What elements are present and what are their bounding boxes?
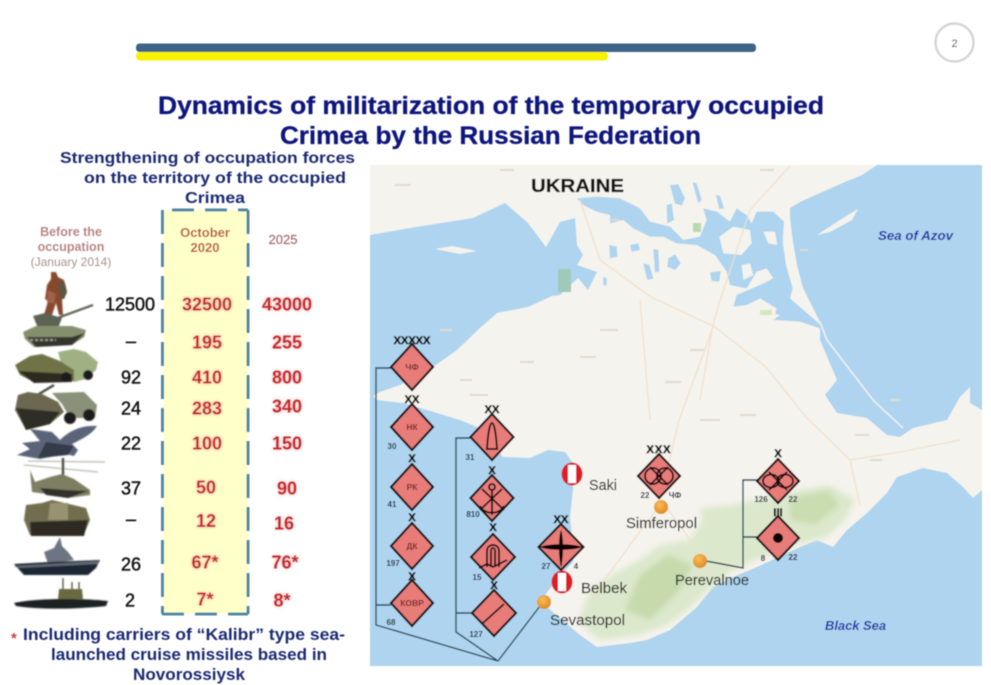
figures 2025: 340 bbox=[272, 396, 302, 416]
symbol: НК division bbox=[388, 394, 433, 451]
page number badge bbox=[936, 24, 974, 62]
symbol: brigade 127: X bbox=[490, 580, 498, 592]
marker: Belbek airfield bbox=[552, 570, 572, 594]
symbol: missile division 31: XX bbox=[485, 404, 500, 416]
figures October 2020: 50 bbox=[196, 478, 216, 498]
subtitle: strengthening of occupation forces bbox=[60, 150, 355, 207]
page number badge: 2 bbox=[951, 38, 958, 50]
symbol: brigade 126: 22 bbox=[789, 495, 798, 504]
icon: soldier bbox=[44, 272, 67, 315]
icon: self-propelled gun and truck bbox=[15, 385, 97, 430]
figures 2025: 150 bbox=[272, 434, 302, 454]
figures 2025: 90 bbox=[277, 478, 297, 498]
symbol: Black Sea Fleet headquarters bbox=[391, 335, 433, 390]
symbol: КОВР brigade: X bbox=[408, 571, 416, 583]
figures October 2020: 32500 bbox=[182, 294, 232, 314]
figures 2025: 8* bbox=[273, 590, 291, 610]
column headers: 2020 bbox=[191, 240, 219, 255]
figures before the occupation: 26 bbox=[121, 554, 141, 574]
marker: Simferopol bbox=[654, 500, 668, 514]
symbol: РК brigade: 41 bbox=[388, 500, 397, 509]
figures October 2020: 410 bbox=[192, 368, 222, 388]
symbol: air division 27: 27 bbox=[542, 562, 551, 571]
label: Sevastopol: Sevastopol bbox=[550, 613, 625, 629]
label: Perevalnoe: Perevalnoe bbox=[675, 573, 749, 589]
symbol: brigade 127: 127 bbox=[469, 630, 483, 639]
symbol: ДК brigade: ДК bbox=[406, 541, 418, 551]
figures 2025: 76* bbox=[271, 552, 299, 572]
figures October 2020: 283 bbox=[192, 398, 222, 418]
icon: fighter jet bbox=[17, 426, 97, 459]
symbol: brigade 126: 126 bbox=[754, 495, 768, 504]
Ukraine label: UKRAINE bbox=[531, 176, 624, 196]
connector lines to Perevalnoe bbox=[706, 480, 757, 568]
figures before the occupation: – bbox=[126, 331, 136, 351]
footnote on Kalibr carriers bbox=[11, 626, 345, 684]
symbol: НК division: 30 bbox=[388, 442, 397, 451]
symbol: НК division: XX bbox=[405, 394, 420, 406]
column headers: (January 2014) bbox=[31, 255, 111, 269]
figures before the occupation: – bbox=[126, 509, 136, 529]
figures before the occupation: 92 bbox=[121, 368, 141, 388]
figures October 2020: 100 bbox=[192, 434, 222, 454]
icon: armoured vehicles bbox=[15, 349, 98, 383]
symbol: regiment 8: 22 bbox=[789, 553, 798, 562]
figures before the occupation: 37 bbox=[121, 478, 141, 498]
title: Crimea by the Russian Federation bbox=[280, 122, 701, 150]
symbol: missile brigade 15: 15 bbox=[473, 573, 482, 582]
footnote on Kalibr carriers: Including carriers of “Kalibr” type sea- bbox=[23, 626, 345, 644]
title: Dynamics of militarization of the temporary occupied bbox=[158, 92, 824, 120]
Sea of Azov label: Sea of Azov bbox=[878, 228, 954, 243]
symbol: missile brigade 15 bbox=[471, 522, 515, 582]
subtitle: strengthening of occupation forces: Crimea bbox=[185, 190, 245, 207]
icon: tank bbox=[23, 305, 93, 347]
symbol: РК brigade: РК bbox=[407, 482, 418, 492]
Black Sea label: Black Sea bbox=[825, 618, 886, 633]
symbol: РК brigade bbox=[388, 453, 433, 510]
symbol: naval infantry brigade 810: X bbox=[488, 465, 496, 477]
faint place names bbox=[395, 170, 900, 460]
icon: submarine bbox=[14, 578, 108, 609]
forest and mountains bbox=[578, 485, 855, 640]
symbol: Black Sea Fleet headquarters: ЧФ bbox=[405, 362, 419, 372]
symbol: ДК brigade: X bbox=[408, 512, 416, 524]
connector lines to Sevastopol bbox=[376, 368, 540, 661]
label: Belbek: Belbek bbox=[581, 581, 628, 597]
figures before the occupation: 2 bbox=[125, 590, 135, 610]
figures 2025: 800 bbox=[272, 368, 302, 388]
equipment icons column bbox=[14, 272, 108, 609]
subtitle: strengthening of occupation forces: Strengthening of occupation forces bbox=[60, 150, 355, 167]
symbol: corps at Simferopol: ЧФ bbox=[669, 491, 681, 500]
figures before the occupation: 12500 bbox=[105, 294, 155, 314]
figures October 2020: 195 bbox=[192, 332, 222, 352]
sea background bbox=[370, 165, 982, 666]
symbol: regiment 8: 8 bbox=[761, 554, 766, 563]
symbol: corps at Simferopol: 22 bbox=[641, 491, 650, 500]
header bars bbox=[136, 44, 756, 60]
footnote on Kalibr carriers: launched cruise missiles based in bbox=[51, 646, 327, 664]
wetland patches bbox=[558, 223, 772, 315]
symbol: air division 27: 4 bbox=[574, 562, 579, 571]
figures October 2020: 67* bbox=[191, 552, 219, 572]
column headers: occupation bbox=[38, 240, 104, 254]
icon: attack helicopter bbox=[24, 458, 105, 498]
column headers: 2025 bbox=[269, 232, 297, 247]
symbol: naval infantry brigade 810 bbox=[466, 465, 514, 521]
figures 2025 bbox=[262, 294, 312, 610]
icon: missile launcher truck bbox=[24, 500, 90, 536]
symbol: ДК brigade: 197 bbox=[386, 559, 400, 568]
label: Simferopol: Simferopol bbox=[626, 516, 697, 532]
land mass bbox=[370, 165, 982, 647]
title bbox=[158, 92, 824, 150]
icon: warship bbox=[14, 537, 100, 575]
symbol: НК division: НК bbox=[406, 422, 418, 432]
figures 2025: 16 bbox=[274, 514, 294, 534]
symbol: РК brigade: X bbox=[408, 453, 416, 465]
Arabat Spit and sand islands bbox=[435, 209, 903, 428]
figures October 2020: 7* bbox=[196, 590, 214, 610]
symbol: regiment 8 bbox=[757, 507, 799, 563]
symbol: brigade 126 bbox=[754, 448, 799, 504]
symbol: naval infantry brigade 810: 810 bbox=[466, 510, 480, 519]
label: Saki: Saki bbox=[589, 478, 617, 494]
symbol: corps at Simferopol bbox=[638, 444, 681, 500]
column headers: Before the bbox=[40, 225, 102, 239]
marker: Perevalnoe bbox=[693, 554, 707, 568]
symbol: air division 27: XX bbox=[554, 514, 569, 526]
symbol: brigade 127 bbox=[469, 580, 516, 639]
footnote on Kalibr carriers: * bbox=[11, 630, 17, 647]
symbol: КОВР brigade: 68 bbox=[387, 618, 396, 627]
subtitle: strengthening of occupation forces: on the territory of the occupied bbox=[84, 170, 346, 187]
symbol: КОВР brigade bbox=[387, 571, 433, 627]
column headers: October bbox=[180, 225, 230, 240]
figures before the occupation: 22 bbox=[121, 434, 141, 454]
symbol: corps at Simferopol: XXX bbox=[646, 444, 672, 456]
figures 2025: 43000 bbox=[262, 294, 312, 314]
figures before the occupation: 24 bbox=[121, 398, 141, 418]
marker: Saki airfield bbox=[562, 462, 582, 486]
symbol: brigade 126: X bbox=[774, 448, 782, 460]
symbol: missile division 31 bbox=[466, 404, 514, 462]
map of Crimea bbox=[370, 165, 982, 666]
symbol: Black Sea Fleet headquarters: XXXXX bbox=[394, 335, 431, 347]
symbol: missile division 31: 31 bbox=[466, 453, 475, 462]
symbol: regiment 8: III bbox=[773, 507, 783, 519]
symbol: air division 27 bbox=[538, 514, 584, 571]
marker: Sevastopol bbox=[537, 595, 551, 609]
symbol: КОВР brigade: КОВР bbox=[400, 598, 424, 608]
Sivash lagoon and channels bbox=[577, 182, 820, 328]
figures October 2020: 12 bbox=[196, 511, 216, 531]
column headers bbox=[31, 225, 297, 269]
symbol: missile brigade 15: X bbox=[489, 522, 497, 534]
symbol: ДК brigade bbox=[386, 512, 433, 569]
roads bbox=[580, 166, 960, 600]
figures before the occupation bbox=[105, 294, 155, 610]
footnote on Kalibr carriers: Novorossiysk bbox=[133, 666, 246, 684]
figures 2025: 255 bbox=[272, 332, 302, 352]
highlighted October 2020 column bbox=[162, 210, 248, 614]
figures October 2020 bbox=[182, 294, 232, 610]
